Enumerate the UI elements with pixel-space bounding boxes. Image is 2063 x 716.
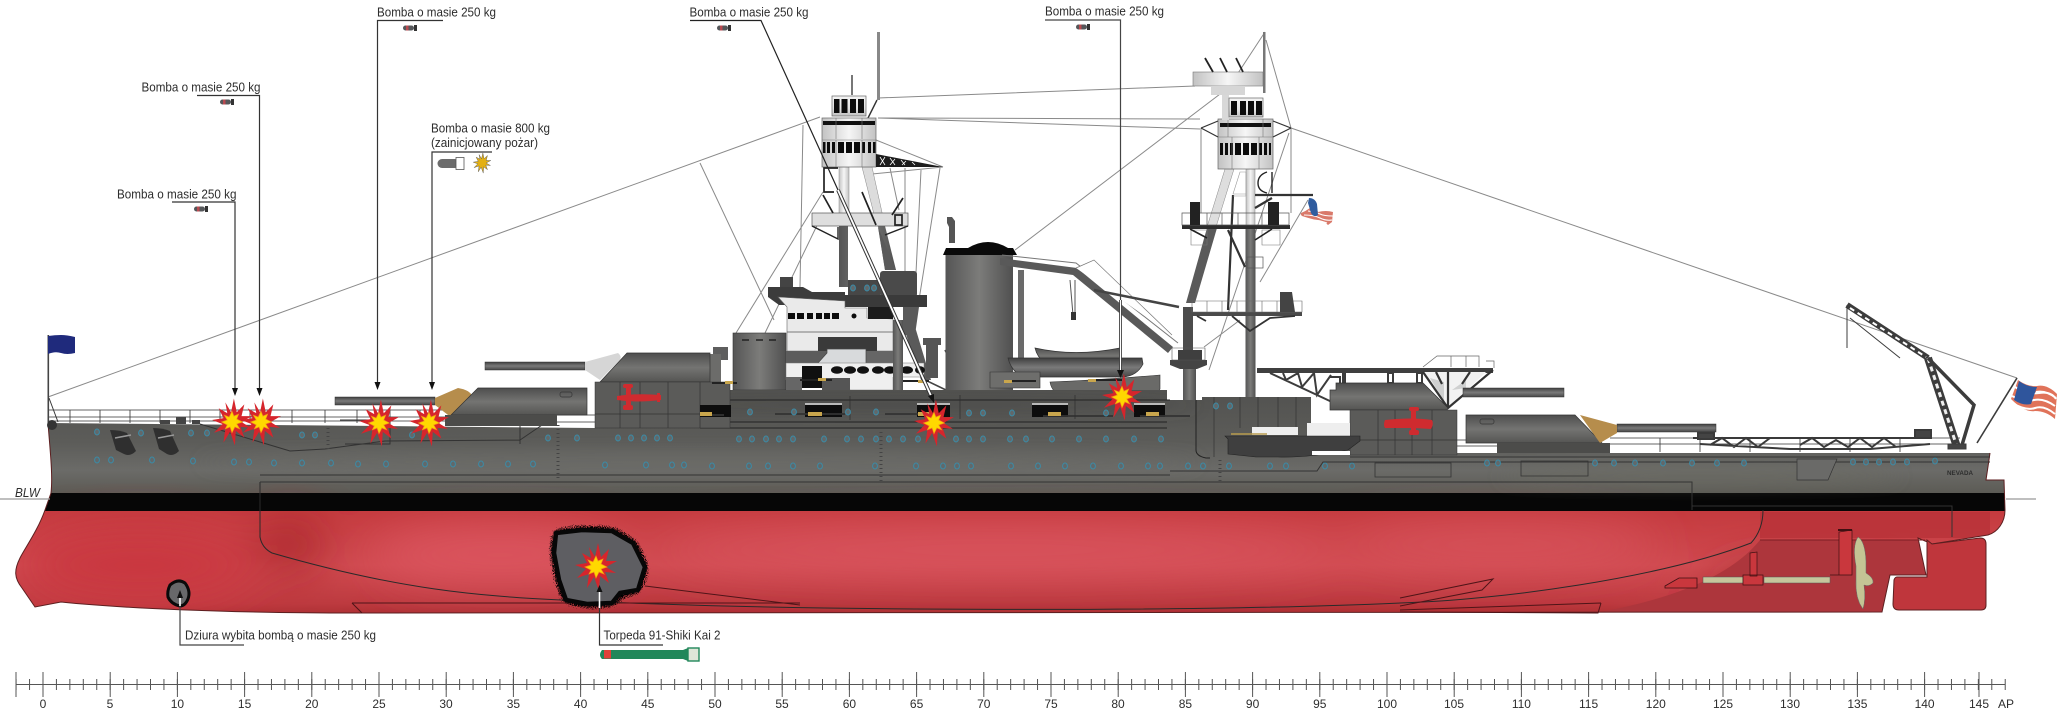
boot-topping <box>0 493 2063 511</box>
mainmast post and collar <box>1183 307 1193 357</box>
callout: bomb 3: Bomba o masie 250 kg <box>377 4 496 20</box>
scale ruler: 10 <box>171 697 184 711</box>
scale ruler: 20 <box>305 697 319 711</box>
casemates and guns <box>700 378 1190 420</box>
scale ruler: 0 <box>40 697 47 711</box>
rudder <box>1893 538 1986 610</box>
scale ruler: 90 <box>1246 697 1260 711</box>
callout: bomb 800 kg: Bomba o masie 800 kg <box>431 120 550 136</box>
flag: bow jack <box>48 335 75 423</box>
small bomb hole <box>168 581 189 606</box>
small uptake <box>923 338 941 378</box>
scale ruler: 65 <box>910 697 924 711</box>
foremast legs <box>839 226 896 287</box>
director platform <box>1193 72 1263 86</box>
callout: bomb 4 (diagonal) <box>690 4 934 403</box>
white bridge <box>778 297 893 351</box>
scale ruler: 145 <box>1969 697 1989 711</box>
bridge superstructure <box>700 271 965 390</box>
scale ruler: 60 <box>843 697 856 711</box>
icon: torpedo <box>600 648 699 661</box>
scale ruler: 25 <box>372 697 386 711</box>
foremast platform <box>812 213 908 226</box>
callout: hole from bomb <box>177 590 376 645</box>
callout: bomb 800 kg <box>429 120 550 390</box>
scale ruler: 35 <box>507 697 520 711</box>
aircraft: aft <box>1384 407 1433 435</box>
scale ruler: 105 <box>1444 697 1464 711</box>
forward tower block <box>733 333 786 390</box>
callout: bomb 2: Bomba o masie 250 kg <box>142 80 260 94</box>
turret 1 with gun and blast bag <box>335 388 587 426</box>
railing: forecastle <box>48 410 1960 452</box>
scale ruler: 140 <box>1915 697 1935 711</box>
scale ruler: 85 <box>1179 697 1192 711</box>
scale ruler: 130 <box>1780 697 1800 711</box>
scale ruler: 40 <box>574 697 588 711</box>
mainmast <box>1170 32 1313 400</box>
flag: stern ensign <box>2011 380 2057 419</box>
aircraft: forward <box>617 384 661 410</box>
boat crane <box>1000 255 1179 353</box>
callout: bomb 5: Bomba o masie 250 kg <box>1045 4 1164 18</box>
foremast tower <box>812 32 943 287</box>
funnel <box>943 217 1024 390</box>
rigging stays <box>48 32 2017 397</box>
scale ruler: 70 <box>977 697 991 711</box>
aft boat and gun <box>1225 423 1837 480</box>
hull silhouette outline <box>16 423 2005 613</box>
portholes <box>95 285 1937 469</box>
waterline BLW: BLW <box>15 485 42 500</box>
lifeboats <box>990 348 1160 398</box>
scale ruler: 110 <box>1512 697 1531 711</box>
callout: bomb 4 (diagonal): Bomba o masie 250 kg <box>690 4 808 20</box>
callout: torpedo: Torpeda 91-Shiki Kai 2 <box>604 628 720 642</box>
callout: bomb 1 <box>117 186 238 396</box>
scale ruler: 135 <box>1847 697 1868 711</box>
bow details <box>47 398 200 430</box>
scale ruler: 15 <box>238 697 252 711</box>
crane <box>1847 305 2017 449</box>
aft truss platform <box>1257 356 1494 408</box>
underwater hull <box>16 511 2004 612</box>
scale ruler: 45 <box>641 697 655 711</box>
scale ruler: 80 <box>1111 697 1125 711</box>
callout: bomb 1: Bomba o masie 250 kg <box>117 186 236 202</box>
callout: torpedo <box>596 585 720 661</box>
scale ruler: 95 <box>1313 697 1327 711</box>
scale ruler: AP <box>1998 697 2014 711</box>
callout: bomb 2 <box>142 80 262 396</box>
scale ruler: 100 <box>1377 697 1397 711</box>
shafts and propeller <box>1665 529 1873 609</box>
white oval-window deck <box>786 363 924 390</box>
foremast searchlight truss <box>876 154 943 167</box>
callout: hole from bomb: Dziura wybita bombą o masie 250 kg <box>185 628 376 642</box>
foremast top box <box>832 96 866 116</box>
turret 2 with gun <box>485 353 730 428</box>
scale ruler: 120 <box>1646 697 1666 711</box>
flag: mainmast ensign <box>1301 198 1333 225</box>
scale ruler: 5 <box>107 697 114 711</box>
scale ruler: 55 <box>775 697 789 711</box>
aft bridge blocks <box>848 280 880 300</box>
scale ruler: 30 <box>439 697 453 711</box>
scale ruler: 75 <box>1044 697 1058 711</box>
turret 3 with gun <box>1330 383 1564 455</box>
hull <box>16 390 2004 612</box>
ship name: NEVADA <box>1947 470 1973 477</box>
callout: bomb 5 <box>1045 4 1164 378</box>
catapult <box>1693 430 1932 449</box>
bridge wing box <box>818 349 866 364</box>
scale ruler: 115 <box>1579 697 1598 711</box>
explosions <box>212 373 1142 447</box>
scale ruler: 125 <box>1713 697 1733 711</box>
torpedo hole <box>554 530 645 604</box>
scale ruler: 50 <box>708 697 722 711</box>
mainmast platforms <box>1182 225 1290 229</box>
callout: bomb 800 kg: (zainicjowany pożar) <box>431 135 538 150</box>
anchors <box>110 428 179 455</box>
turret 4 with gun and blast bag <box>1466 415 1716 453</box>
scale ruler <box>16 672 2014 711</box>
callout: bomb 3 <box>374 4 496 390</box>
hull detail lines <box>200 397 1990 613</box>
ladder rungs <box>328 425 1220 482</box>
mainmast top boxes <box>1218 119 1273 169</box>
bridge top <box>768 287 845 305</box>
